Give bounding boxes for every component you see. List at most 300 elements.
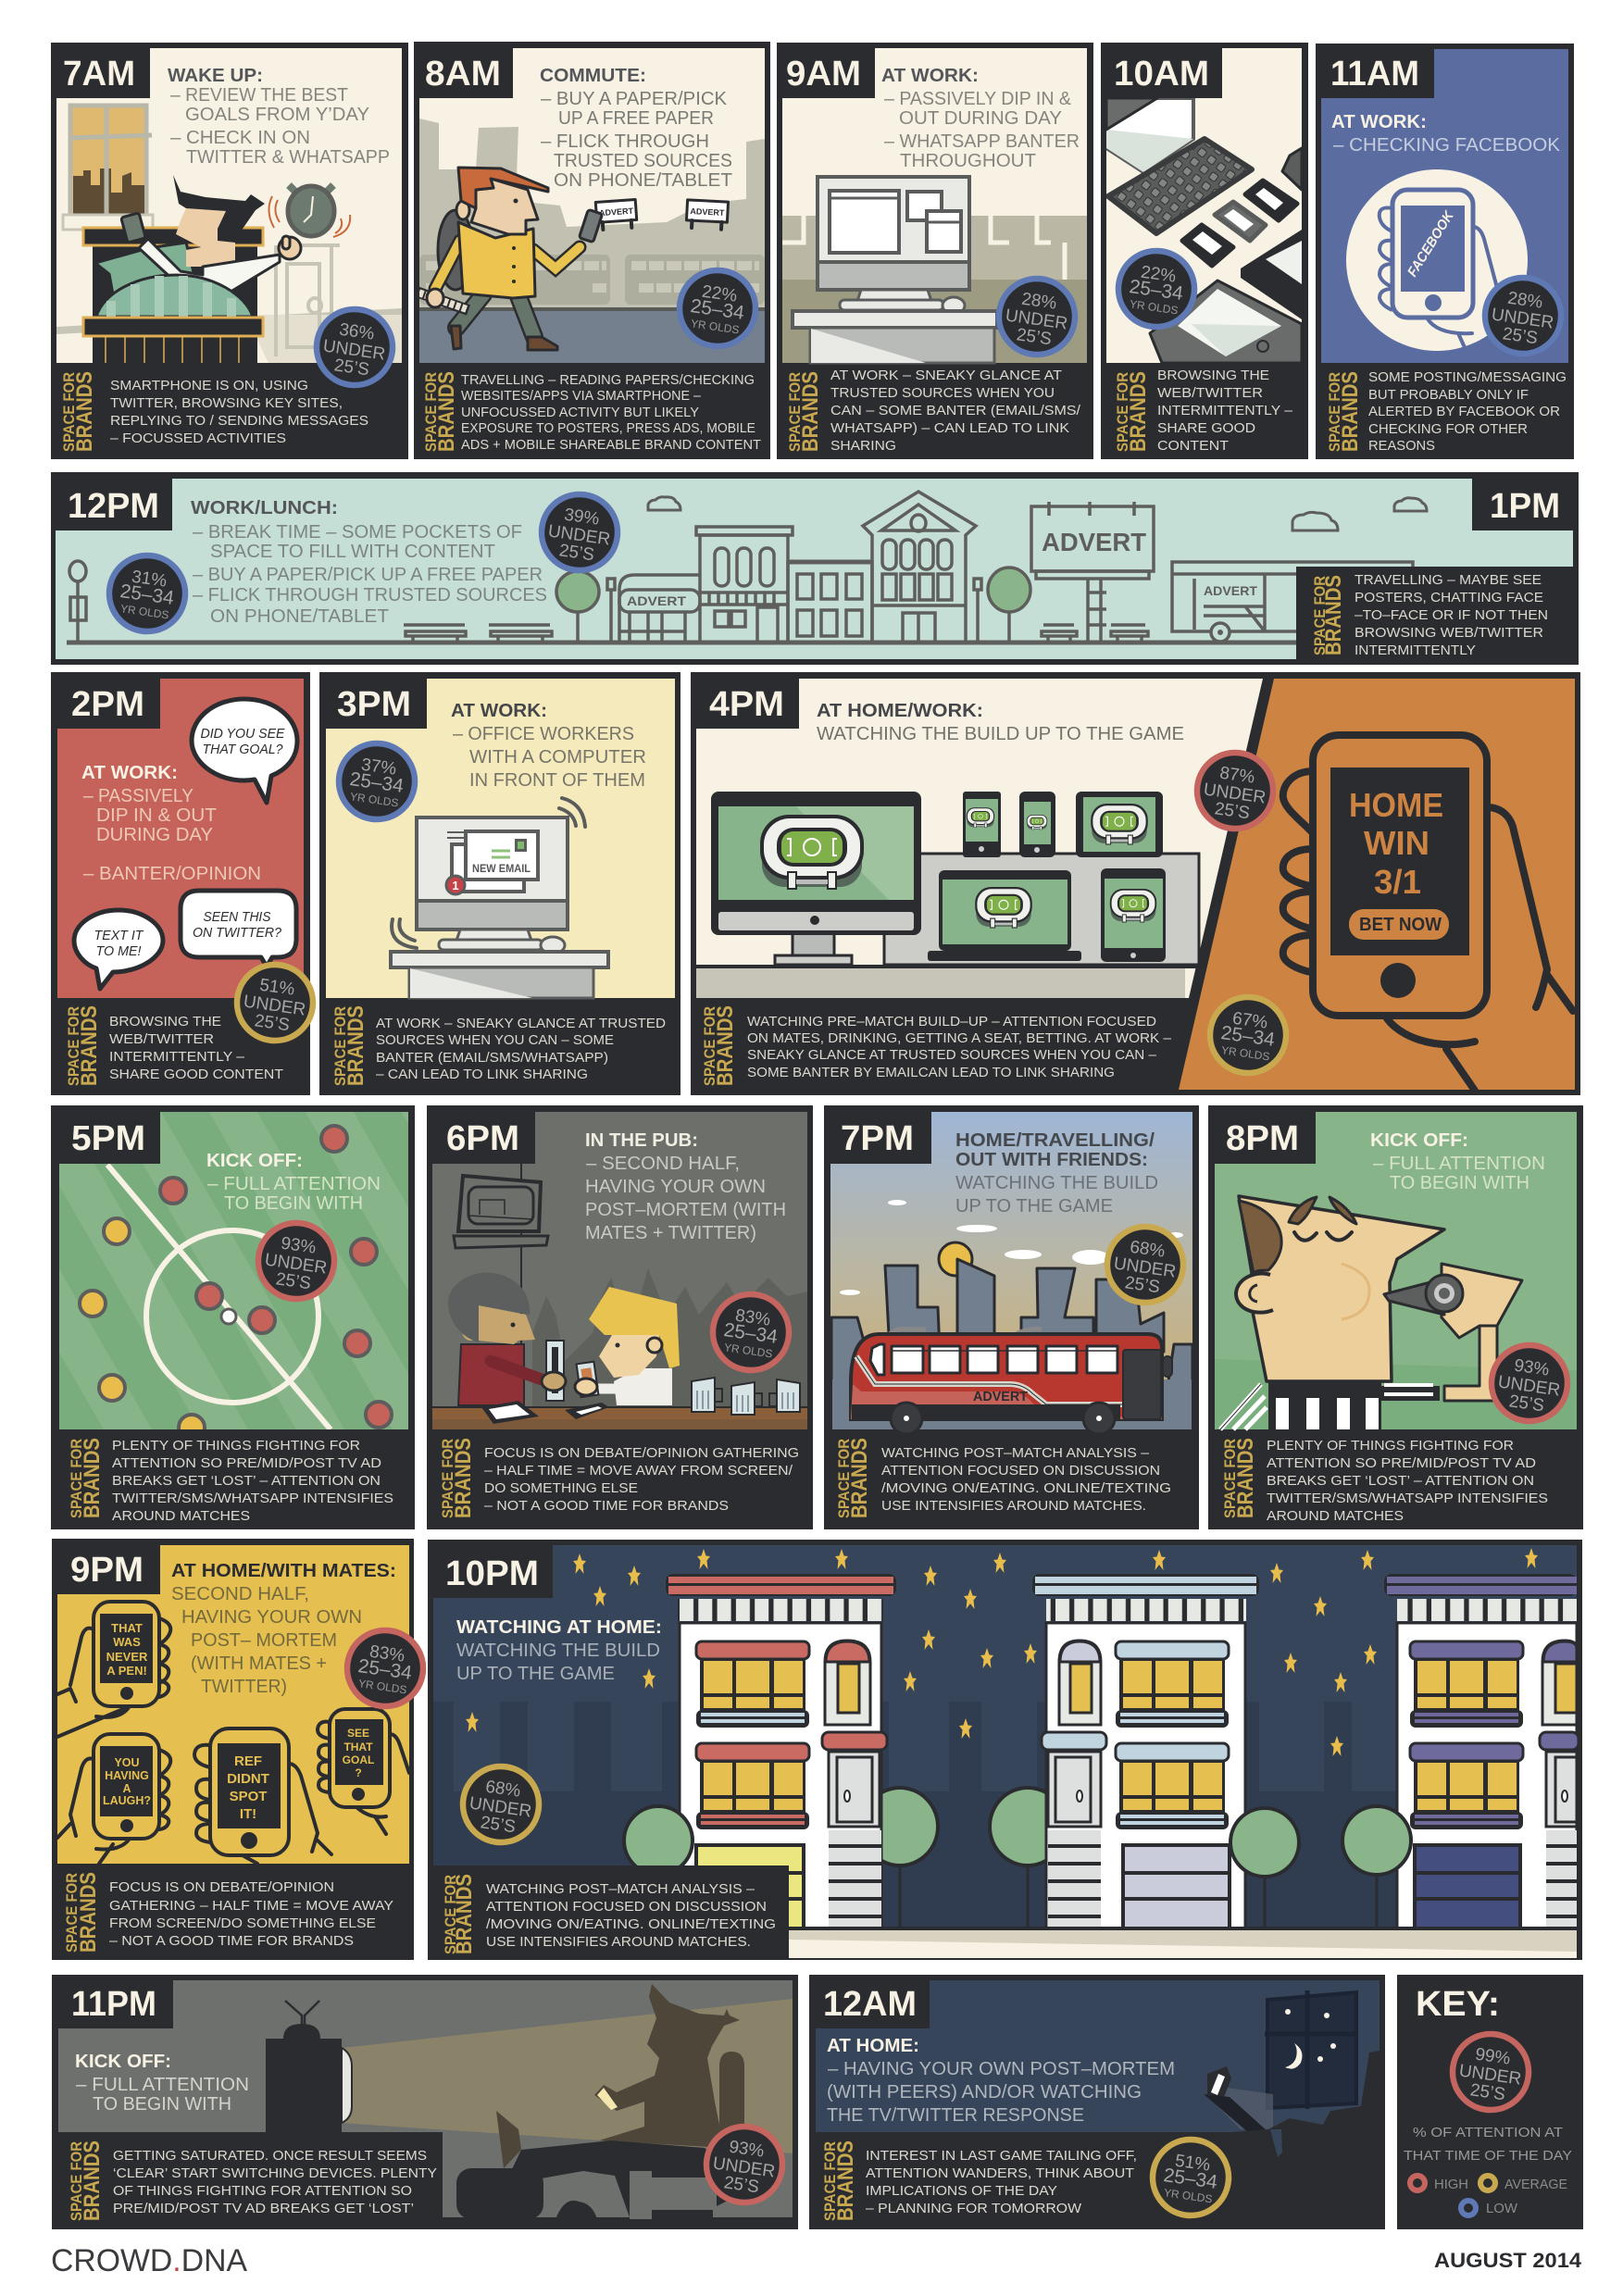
text: office workers: AT WORK: (451, 701, 547, 721)
label: space for brands: SPACE FOR (63, 1873, 81, 1953)
time label: 11PM (52, 1975, 173, 2028)
badge: 22% 25-34: YR OLDS (1129, 297, 1179, 317)
text: in the pub: MATES + TWITTER) (585, 1223, 756, 1243)
badge: 39% under 25s: UNDER (547, 521, 611, 550)
badge: 67% 25-34: YR OLDS (1220, 1043, 1270, 1063)
text: space for brands copy: AT WORK – SNEAKY GLANCE AT (830, 368, 1062, 383)
text: office workers (451, 701, 646, 791)
text: commute (540, 66, 732, 191)
illustration: football pitch with players (80, 1126, 392, 1441)
text: space for brands copy: GATHERING – HALF TIME = MOVE AWAY (109, 1898, 393, 1914)
text: home travelling out with friends (955, 1130, 1158, 1217)
text: space for brands copy: OF THINGS FIGHTING FOR ATTENTION SO (113, 2183, 412, 2199)
badge: 22% 25-34: 22% (701, 282, 739, 306)
illustration: hand holding phone with facebook (1346, 169, 1528, 354)
badge: 93% under 25s: 25’S (275, 1269, 312, 1293)
text: space for brands copy: SHARING (830, 438, 896, 454)
text: space for brands copy: SOME BANTER BY EMAILCAN LEAD TO LINK SHARING (747, 1065, 1115, 1080)
time label: 9AM: 9AM (786, 55, 861, 94)
time label: 5PM (51, 1105, 160, 1164)
text: at home: AT HOME: (827, 2036, 919, 2056)
illustration: street scene outline (67, 492, 1427, 643)
label: space for brands (835, 1438, 872, 1518)
text: space for brands copy: – HALF TIME = MOVE AWAY FROM SCREEN/ (484, 1463, 793, 1479)
text: space for brands copy: ATTENTION SO PRE/MID/POST TV AD (1267, 1455, 1536, 1471)
text: at work checking facebook: – CHECKING FACEBOOK (1333, 135, 1561, 156)
badge: 28% under 25s: 28% (1020, 290, 1058, 314)
time label: 7AM (51, 43, 150, 98)
badge: 51% under 25s: 51% (258, 976, 296, 1000)
illustration: phone with that was never a pen: NEVER (106, 1650, 148, 1664)
text: commute: ON PHONE/TABLET (554, 170, 732, 191)
badge: 83% 25-34: YR OLDS (723, 1341, 773, 1360)
illustration: pavement (433, 1927, 1577, 1958)
panel: 9AM at work (777, 43, 1093, 459)
label: space for brands: SPACE FOR (60, 372, 78, 452)
illustration: computer with new email: NEW EMAIL (472, 862, 531, 875)
time label: 5PM: 5PM (71, 1119, 145, 1158)
text: in the pub (585, 1130, 786, 1243)
text: kick off (206, 1151, 381, 1214)
text: space for brands copy: PLENTY OF THINGS FIGHTING FOR (1267, 1438, 1514, 1454)
label: space for brands: BRANDS (713, 1005, 738, 1086)
badge: 39% under 25s: 25’S (558, 541, 595, 565)
badge: 99% under 25s: UNDER (1458, 2061, 1522, 2090)
illustration: phone with see that goal: GOAL (343, 1753, 374, 1766)
text: space for brands copy (109, 1879, 393, 1949)
illustration: phone with see that goal (318, 1709, 409, 1834)
speech bubble: text it to me (74, 910, 163, 989)
badge: 93% under 25s: 25’S (1508, 1391, 1545, 1416)
time label: 2PM (51, 672, 160, 729)
text: watching the build up: WATCHING THE BUILD UP TO THE GAME (817, 724, 1184, 744)
badge: 87% under 25s: 25’S (1214, 799, 1251, 823)
badge: 22% 25-34: 22% (1140, 263, 1178, 287)
badge: 93% under 25s (702, 2122, 787, 2207)
text: work lunch: SPACE TO FILL WITH CONTENT (210, 542, 495, 562)
text: at work: DIP IN & OUT (96, 805, 217, 826)
text: space for brands copy (484, 1445, 799, 1514)
illustration: hand holding phone with bet offer: BET NOW (1359, 915, 1442, 935)
panel: space for brands 1PM: INTERMITTENTLY (1355, 643, 1476, 658)
time label: 6PM (427, 1105, 535, 1164)
text: commute: COMMUTE: (540, 66, 646, 86)
panel: 10AM devices (1101, 43, 1308, 459)
text: space for brands copy: TRUSTED SOURCES WHEN YOU (830, 385, 1055, 401)
panel: 8AM commute (411, 42, 770, 459)
badge: 67% 25-34: 67% (1231, 1009, 1269, 1033)
text: at home with mates: SECOND HALF, (171, 1584, 309, 1604)
text: wake up: – REVIEW THE BEST (170, 85, 348, 106)
text: space for brands copy: DO SOMETHING ELSE (484, 1480, 638, 1496)
text: space for brands copy: SOURCES WHEN YOU CAN – SOME (376, 1032, 614, 1048)
panel: space for brands 10PM: ATTENTION FOCUSED ON DISCUSSION (486, 1899, 767, 1915)
label: space for brands: SPACE FOR (422, 372, 440, 452)
illustration: window with moon and stars, silhouette on phone (1168, 1990, 1380, 2229)
label: space for brands: BRANDS (1126, 371, 1151, 452)
badge: 22% 25-34 (675, 266, 760, 351)
panel: 6PM in the pub (427, 1105, 813, 1529)
text: key description: THAT TIME OF THE DAY (1404, 2148, 1572, 2164)
text: at work: THROUGHOUT (900, 151, 1036, 171)
text: space for brands copy: BUT PROBABLY ONLY IF (1368, 387, 1529, 403)
legend: high (1410, 2176, 1468, 2192)
text: space for brands copy: BREAKS GET ‘LOST’ – ATTENTION ON (1267, 1473, 1534, 1489)
text: at work: – PASSIVELY DIP IN & (884, 89, 1072, 109)
time label: 12PM: 12PM (68, 487, 159, 526)
panel: space for brands 1PM (1296, 567, 1579, 665)
badge: 68% under 25s: UNDER (1113, 1254, 1177, 1282)
text: at work: – PASSIVELY (83, 786, 194, 806)
text: at home: THE TV/TWITTER RESPONSE (827, 2105, 1084, 2126)
text: wake up (168, 66, 390, 168)
illustration: phone with that was never a pen: THAT (111, 1621, 143, 1635)
time label: 10AM: 10AM (1114, 55, 1209, 94)
speech bubble: seen this on twitter (181, 891, 296, 967)
time label: 1PM: 1PM (1490, 487, 1560, 526)
badge: 51% 25-34 (1148, 2135, 1233, 2220)
time label: 6PM: 6PM (446, 1119, 519, 1158)
panel: 5PM kick off pitch (51, 1105, 415, 1529)
text: home travelling out with friends: HOME/TRAVELLING/ (955, 1130, 1155, 1151)
illustration: bus in front of city skyline at sunset (831, 1200, 1192, 1434)
text: watching the build up: AT HOME/WORK: (817, 701, 983, 721)
label: space for brands: BRANDS (77, 1005, 102, 1086)
text: watching at home: UP TO THE GAME (456, 1664, 615, 1684)
illustration: phone with you having a laugh: A (122, 1782, 131, 1795)
panel: 9PM at home with mates (52, 1539, 428, 1960)
dark panel: space for brands 11PM (52, 2132, 443, 2229)
speech bubble: seen this on twitter: ON TWITTER? (193, 925, 282, 941)
illustration: street scene outline: ADVERT (627, 593, 686, 608)
label: space for brands: SPACE FOR (1326, 372, 1343, 452)
text: kick off: – FULL ATTENTION (1373, 1154, 1545, 1174)
text: kick off: TO BEGIN WITH (93, 2094, 231, 2115)
text: work lunch: – BREAK TIME – SOME POCKETS OF (193, 522, 522, 543)
badge: 93% under 25s: UNDER (1497, 1372, 1561, 1401)
text: space for brands copy: ON MATES, DRINKING, GETTING A SEAT, BETTING. AT WORK – (747, 1030, 1172, 1046)
legend: average: AVERAGE (1504, 2177, 1567, 2192)
label: space for brands (65, 1005, 102, 1086)
label: space for brands (1326, 371, 1363, 452)
panel: space for brands 10PM: /MOVING ON/EATING. ONLINE/TEXTING (486, 1916, 776, 1932)
label: space for brands (331, 1005, 368, 1086)
illustration: phone with ref didnt spot it: IT! (240, 1806, 256, 1822)
time label: 4PM: 4PM (709, 685, 784, 724)
label: space for brands: SPACE FOR (786, 372, 804, 452)
speech bubble: text it to me: TEXT IT (94, 928, 144, 943)
text: at home (827, 2036, 1175, 2126)
badge: 83% 25-34 (708, 1290, 793, 1375)
badge: 37% 25-34: 37% (360, 755, 398, 780)
text: space for brands copy: SNEAKY GLANCE AT TRUSTED SOURCES WHEN YOU CAN – (747, 1047, 1157, 1063)
text: at home: (WITH PEERS) AND/OR WATCHING (827, 2082, 1142, 2103)
text: kick off: KICK OFF: (206, 1151, 303, 1171)
text: space for brands copy: UNFOCUSSED ACTIVITY BUT LIKELY (461, 405, 699, 420)
text: work lunch: ON PHONE/TABLET (210, 606, 389, 627)
badge: 87% under 25s: UNDER (1203, 780, 1267, 808)
panel: space for brands 1PM: BRANDS (1321, 575, 1346, 655)
text: kick off: KICK OFF: (75, 2052, 171, 2072)
speech bubble: text it to me: TO ME! (96, 943, 142, 959)
text: space for brands copy: – PLANNING FOR TOMORROW (866, 2201, 1082, 2216)
illustration: commuter on street with adverts: ADVERT (690, 206, 725, 218)
badge: 68% under 25s: 68% (484, 1778, 522, 1802)
text: at work checking facebook: AT WORK: (1331, 112, 1427, 132)
panel: 12PM and 1PM street (51, 472, 1579, 665)
badge: 93% under 25s: UNDER (712, 2153, 776, 2182)
badge: 51% under 25s (232, 960, 318, 1045)
time label: 11AM (1316, 44, 1434, 98)
badge: 31% 25-34: YR OLDS (119, 602, 169, 621)
time label: 3PM (319, 672, 427, 729)
panel: space for brands 10PM: WATCHING POST–MATCH ANALYSIS – (486, 1881, 755, 1897)
text: wake up: TWITTER & WHATSAPP (186, 147, 390, 168)
badge: 28% under 25s (994, 274, 1080, 359)
badge: 51% 25-34: 51% (1174, 2152, 1212, 2176)
time label: 12AM (809, 1975, 930, 2028)
badge: 36% under 25s (312, 305, 397, 390)
text: space for brands copy: REASONS (1368, 438, 1435, 454)
text: space for brands copy: EXPOSURE TO POSTERS, PRESS ADS, MOBILE (461, 420, 755, 436)
badge: 87% under 25s: 87% (1218, 764, 1256, 788)
text: space for brands copy: SOME POSTING/MESSAGING (1368, 369, 1567, 385)
illustration: phone with ref didnt spot it: REF (234, 1753, 262, 1769)
heading: key: KEY: (1416, 1985, 1500, 2024)
text: kick off: – FULL ATTENTION (76, 2075, 249, 2095)
text: space for brands copy: REPLYING TO / SENDING MESSAGES (110, 413, 368, 429)
panel: 10PM night street (428, 1540, 1582, 1960)
badge: 93% under 25s: 93% (1513, 1356, 1551, 1380)
label: space for brands: BRANDS (72, 371, 97, 452)
badge: 51% 25-34: YR OLDS (1163, 2186, 1213, 2205)
dark panel: space for brands 12AM (809, 2132, 1168, 2229)
text: kick off: – FULL ATTENTION (207, 1174, 381, 1194)
text: space for brands copy: AROUND MATCHES (1267, 1508, 1404, 1524)
illustration: friends at the pub bar (432, 1164, 807, 1429)
text: space for brands copy: – CAN LEAD TO LINK SHARING (376, 1067, 588, 1082)
illustration: trees in front of houses (624, 1806, 1411, 1928)
badge: 31% 25-34: 25–34 (119, 580, 176, 609)
panel: space for brands 1PM: SPACE FOR (1311, 576, 1329, 655)
text: at work (81, 763, 261, 884)
illustration: referee blowing whistle (1215, 1196, 1577, 1429)
badge: 68% under 25s: UNDER (468, 1793, 532, 1822)
time label: 11PM: 11PM (71, 1985, 156, 2024)
illustration: desktop computer at office (782, 177, 1087, 363)
badge: 93% under 25s: 25’S (723, 2173, 760, 2197)
text: space for brands copy (376, 1016, 666, 1082)
badge: 68% under 25s: 25’S (1124, 1273, 1161, 1297)
text: kick off (1370, 1130, 1545, 1193)
text: space for brands copy (747, 1014, 1172, 1080)
text: space for brands copy: AROUND MATCHES (112, 1508, 250, 1524)
panel: space for brands 1PM: –TO–FACE OR IF NOT THEN (1355, 607, 1548, 623)
badge: 99% under 25s (1448, 2029, 1533, 2115)
label: space for brands: SPACE FOR (835, 1439, 853, 1518)
panel: 2PM at work (51, 672, 318, 1095)
panel: space for brands 1PM: POSTERS, CHATTING FACE (1355, 590, 1543, 605)
text: home travelling out with friends: UP TO THE GAME (955, 1196, 1113, 1217)
text: office workers: – OFFICE WORKERS (453, 724, 634, 744)
illustration: phone with that was never a pen (57, 1602, 170, 1737)
text: space for brands copy: TWITTER/SMS/WHATSAPP INTENSIFIES (112, 1491, 393, 1506)
illustration: night sky band (433, 1702, 1577, 1928)
text: at home with mates: TWITTER) (201, 1677, 287, 1697)
text: space for brands copy: ALERTED BY FACEBOOK OR (1368, 404, 1560, 419)
panel: space for brands 1PM: BROWSING WEB/TWITTER (1355, 625, 1543, 641)
panel: space for brands 10PM: BRANDS (452, 1874, 477, 1954)
panel: 7AM wake up (51, 43, 408, 459)
text: wake up: WAKE UP: (168, 66, 263, 86)
text: space for brands copy: CHECKING FOR OTHER (1368, 421, 1528, 437)
illustration: phone with ref didnt spot it (194, 1728, 331, 1864)
text: in the pub: HAVING YOUR OWN (585, 1177, 766, 1197)
label: space for brands (60, 371, 97, 452)
text: space for brands copy: WEB/TWITTER (109, 1031, 214, 1047)
time label: 10AM (1101, 43, 1222, 98)
illustration: phone with ref didnt spot it: DIDNT (227, 1771, 269, 1787)
time label: 7PM: 7PM (841, 1119, 914, 1158)
label: space for brands: BRANDS (451, 1438, 476, 1518)
badge: 37% 25-34: YR OLDS (349, 790, 399, 809)
text: space for brands copy (866, 2148, 1137, 2216)
time label: 4PM (691, 672, 799, 729)
text: watching at home (456, 1617, 662, 1684)
text: space for brands copy: USE INTENSIFIES AROUND MATCHES. (881, 1498, 1146, 1514)
text: at work: – BANTER/OPINION (83, 864, 261, 884)
badge: 93% under 25s: 93% (280, 1234, 318, 1258)
label: space for brands: SPACE FOR (821, 2141, 839, 2221)
label: space for brands (63, 1872, 101, 1953)
text: space for brands copy (110, 378, 368, 446)
text: space for brands copy: WHATSAPP) – CAN LEAD TO LINK (830, 420, 1069, 436)
illustration: computer with new email: 1 (452, 879, 459, 892)
text: space for brands copy: FOCUS IS ON DEBATE/OPINION GATHERING (484, 1445, 799, 1461)
badge: 68% under 25s (1103, 1222, 1188, 1307)
speech bubble: seen this on twitter: SEEN THIS (204, 909, 270, 925)
text: at home: – HAVING YOUR OWN POST–MORTEM (828, 2059, 1175, 2079)
badge: 36% under 25s: 25’S (333, 356, 370, 380)
illustration: commuter on street with adverts (411, 119, 765, 363)
time label: 10PM (428, 1540, 553, 1598)
illustration: phone with you having a laugh: LAUGH? (103, 1794, 151, 1807)
text: space for brands copy: – NOT A GOOD TIME FOR BRANDS (484, 1498, 729, 1514)
text: space for brands copy: – FOCUSSED ACTIVITIES (110, 430, 286, 446)
text: space for brands copy: BANTER (EMAIL/SMS/WHATSAPP) (376, 1050, 608, 1066)
label: space for brands: BRANDS (343, 1005, 368, 1086)
text: space for brands copy: TWITTER, BROWSING KEY SITES, (110, 395, 343, 411)
text: space for brands copy: INTERMITTENTLY – (1157, 403, 1293, 418)
text: space for brands copy: FOCUS IS ON DEBATE/OPINION (109, 1879, 334, 1895)
text: space for brands copy: WATCHING POST–MATCH ANALYSIS – (881, 1445, 1150, 1461)
label: space for brands: BRANDS (80, 2140, 105, 2221)
text: at work (881, 66, 1080, 171)
legend: low: LOW (1486, 2201, 1518, 2216)
badge: 83% 25-34: YR OLDS (357, 1677, 407, 1696)
text: space for brands copy: BROWSING THE (109, 1014, 221, 1029)
illustration: trees behind houses (862, 1788, 1066, 1928)
text: at home with mates: HAVING YOUR OWN (181, 1607, 362, 1628)
illustration: hand holding phone with bet offer (1283, 735, 1573, 1091)
time label: 7PM (824, 1105, 931, 1164)
text: space for brands copy (461, 372, 761, 453)
panel: 11AM facebook (1316, 44, 1574, 459)
panel: space for brands 10PM: USE INTENSIFIES AROUND MATCHES. (486, 1934, 751, 1950)
text: space for brands copy: ‘CLEAR’ START SWITCHING DEVICES. PLENTY (113, 2165, 437, 2181)
text: space for brands copy (113, 2148, 437, 2216)
badge: 22% 25-34: 25–34 (1128, 276, 1185, 305)
label: space for brands: SPACE FOR (701, 1006, 718, 1086)
illustration: hand holding phone with facebook: FACEBOOK (1405, 207, 1457, 280)
text: space for brands copy: INTERMITTENTLY – (109, 1049, 245, 1065)
illustration: phone with ref didnt spot it: SPOT (230, 1789, 267, 1804)
illustration: house three purple (1384, 1574, 1579, 1928)
badge: 87% under 25s (1192, 748, 1278, 833)
badge: 22% 25-34: YR OLDS (690, 317, 740, 336)
text: work lunch: WORK/LUNCH: (191, 498, 338, 518)
badge: 39% under 25s (537, 490, 622, 575)
text: space for brands copy: ADS + MOBILE SHAREABLE BRAND CONTENT (461, 437, 761, 453)
text: space for brands copy: WATCHING PRE–MATCH BUILD–UP – ATTENTION FOCUSED (747, 1014, 1156, 1029)
badge: 28% under 25s: 28% (1506, 289, 1544, 313)
badge: 37% 25-34 (334, 739, 419, 824)
badge: 28% under 25s: 25’S (1016, 325, 1053, 349)
illustration: phone with you having a laugh: HAVING (105, 1769, 149, 1782)
time label: 8AM (414, 42, 513, 98)
label: space for brands: SPACE FOR (68, 2141, 85, 2221)
badge: 39% under 25s: 39% (563, 505, 601, 530)
text: space for brands copy (1368, 369, 1567, 454)
illustration: street scene outline: ADVERT (1042, 528, 1146, 556)
text: at work: AT WORK: (81, 763, 178, 783)
badge: 83% 25-34 (343, 1626, 428, 1711)
text: space for brands copy: INTEREST IN LAST GAME TAILING OFF, (866, 2148, 1137, 2164)
legend: low (1461, 2201, 1518, 2216)
illustration: street scene outline: ADVERT (1204, 583, 1257, 598)
text: in the pub: IN THE PUB: (585, 1130, 698, 1151)
illustration: hand holding phone with bet offer: WIN (1364, 824, 1429, 862)
text: space for brands copy: ATTENTION SO PRE/MID/POST TV AD (112, 1455, 381, 1471)
panel: 12AM at home (809, 1975, 1385, 2229)
panel: space for brands 10PM (428, 1866, 789, 1960)
label: space for brands: SPACE FOR (439, 1439, 456, 1518)
badge: 83% 25-34: 83% (734, 1306, 772, 1330)
legend: high: HIGH (1434, 2177, 1468, 2192)
text: at work: DURING DAY (96, 825, 213, 845)
text: kick off: TO BEGIN WITH (224, 1193, 363, 1214)
time label: 9PM (52, 1539, 160, 1594)
text: space for brands copy: SHARE GOOD CONTENT (109, 1067, 283, 1082)
text: at work: AT WORK: (881, 66, 979, 86)
text: wake up: – CHECK IN ON (170, 128, 310, 148)
illustration: phone with see that goal: SEE (347, 1727, 369, 1740)
badge: 51% under 25s: 25’S (254, 1011, 291, 1035)
text: office workers: WITH A COMPUTER (469, 747, 646, 767)
text: space for brands copy (830, 368, 1081, 454)
badge: 51% under 25s: UNDER (243, 992, 306, 1020)
illustration: phone with that was never a pen: WAS (113, 1635, 141, 1649)
text: space for brands copy (1267, 1438, 1548, 1524)
date: august 2014: AUGUST 2014 (1434, 2249, 1582, 2272)
illustration: computer with new email (391, 798, 608, 998)
label: space for brands (1114, 371, 1151, 452)
illustration: stars (466, 1548, 1538, 1756)
text: space for brands copy: PRE/MID/POST TV AD BREAKS GET ‘LOST’ (113, 2201, 414, 2216)
text: commute: UP A FREE PAPER (558, 108, 714, 129)
illustration: man waking up in bed with alarm clock (56, 104, 402, 363)
badge: 37% 25-34: 25–34 (348, 768, 406, 797)
